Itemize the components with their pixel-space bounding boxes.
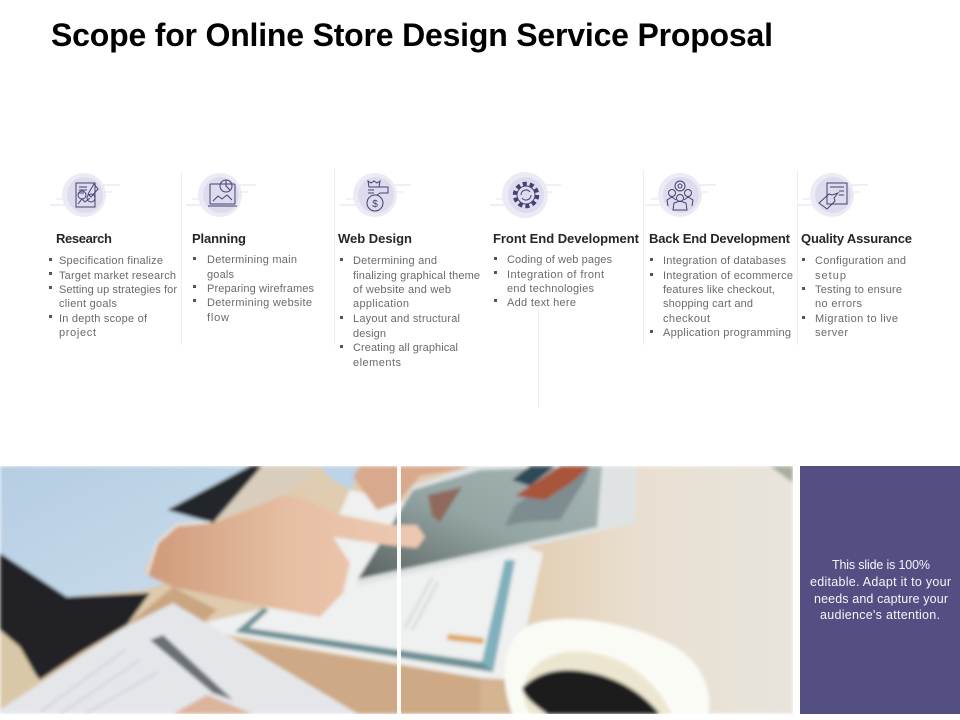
bullet list: shopping cart and [663, 298, 753, 310]
pointing hand [147, 495, 425, 617]
icon: team [645, 173, 716, 217]
bullet list: finalizing graphical theme [353, 270, 480, 282]
bullet list: Creating all graphical [353, 342, 458, 354]
bullet list: Application programming [663, 327, 791, 339]
bullet list: Setting up strategies for [59, 284, 177, 296]
heading: Back End Development [649, 231, 791, 246]
callout text: This slide is 100% [832, 558, 930, 572]
column: Web Design [338, 173, 480, 369]
bullet list [49, 255, 177, 339]
bullet list [193, 254, 314, 324]
bullet list: design [353, 328, 386, 340]
tablet frame [356, 466, 637, 586]
coffee cup [505, 619, 709, 714]
bullet list [802, 255, 906, 339]
heading: Quality Assurance [801, 231, 912, 246]
heading: Planning [192, 231, 246, 246]
white photo seam [397, 466, 401, 714]
callout text [810, 558, 951, 622]
bullet list: Integration of databases [663, 255, 786, 267]
bullet list: project [59, 327, 96, 339]
second hand [353, 466, 480, 510]
photo: hands using a tablet at a desk with coffee [0, 466, 793, 714]
bullet list: server [815, 327, 848, 339]
dividers [182, 168, 798, 408]
icon: planning [186, 173, 256, 217]
bullet list: goals [207, 269, 234, 281]
bullet list: elements [353, 357, 402, 369]
front papers [0, 603, 358, 714]
bullet list: Determining and [353, 255, 437, 267]
bullet list: application [353, 298, 409, 310]
icon: gear [490, 172, 561, 218]
bullet list: no errors [815, 298, 862, 310]
callout text: audience's attention. [820, 608, 940, 622]
bullet list: Determining website [207, 297, 312, 309]
bullet list: setup [815, 270, 846, 282]
bullet list: checkout [663, 313, 710, 325]
dark chair [0, 553, 150, 680]
bullet list: features like checkout, [663, 284, 775, 296]
bullet list: Target market research [59, 270, 176, 282]
column: Back End Development [645, 173, 793, 339]
bullet list: Preparing wireframes [207, 283, 314, 295]
tablet screen [358, 466, 602, 579]
callout text: needs and capture your [814, 592, 948, 606]
bullet list: Configuration and [815, 255, 906, 267]
icon: web design: $ [372, 199, 378, 210]
bullet list: In depth scope of [59, 313, 148, 325]
bullet list [340, 255, 480, 369]
heading: Research [56, 231, 112, 246]
bullet list: Integration of ecommerce [663, 270, 793, 282]
bullet list: Determining main [207, 254, 297, 266]
callout text: editable. Adapt it to your [810, 575, 951, 589]
bullet list: Migration to live [815, 313, 898, 325]
table surface [0, 466, 793, 714]
bullet list: end technologies [507, 283, 594, 295]
column: Research [49, 173, 177, 339]
icon: research [50, 173, 120, 217]
column: Quality Assurance [797, 173, 912, 339]
bullet list [650, 255, 793, 339]
shirt [167, 466, 262, 523]
column: Planning [186, 173, 314, 324]
column: Front End Development [490, 172, 640, 309]
heading: Front End Development [493, 231, 640, 246]
bullet list: of website and web [353, 284, 451, 296]
title: Scope for Online Store Design Service Proposal [51, 17, 773, 53]
bullet list: Add text here [507, 297, 576, 309]
bullet list: Coding of web pages [507, 254, 612, 266]
bullet list: Testing to ensure [815, 284, 902, 296]
icon: web design [340, 173, 411, 217]
bullet list: Specification finalize [59, 255, 163, 267]
heading: Web Design [338, 231, 412, 246]
icon: quality [797, 173, 868, 217]
callout panel [800, 466, 960, 714]
paper under tablet [207, 490, 543, 680]
bullet list: flow [207, 312, 229, 324]
teal border on paper [234, 606, 494, 674]
bullet list: Integration of front [507, 269, 604, 281]
bullet list: client goals [59, 298, 118, 310]
bullet list [494, 254, 612, 309]
bullet list: Layout and structural [353, 313, 460, 325]
